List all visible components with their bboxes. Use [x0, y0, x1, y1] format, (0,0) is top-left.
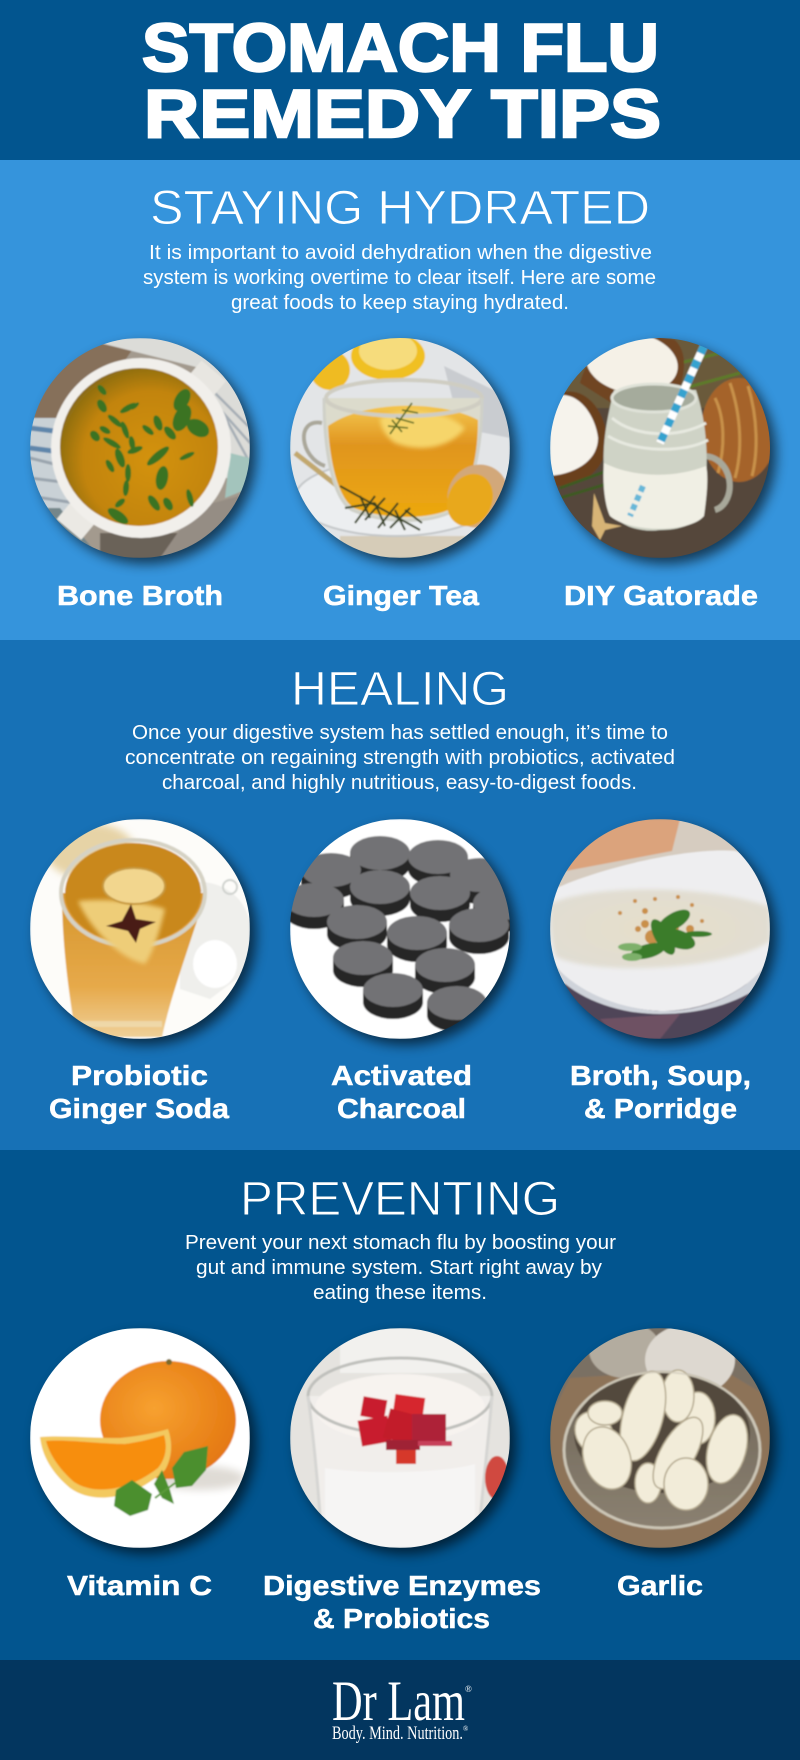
icon: DIY gatorade photo [550, 327, 777, 564]
text block: healing intro [125, 721, 675, 794]
panel: preventing [0, 1150, 800, 1660]
label: activated charcoal [331, 1060, 472, 1124]
heading: preventing: PREVENTING [240, 1173, 560, 1226]
text block: hydration intro: great foods to keep staying hydrated. [231, 291, 569, 314]
label: digestive enzymes and probiotics [263, 1570, 541, 1634]
text block: preventing intro: gut and immune system. Start right away by [196, 1256, 603, 1279]
text block: healing intro: charcoal, and highly nutritious, easy-to-digest foods. [162, 771, 637, 794]
label: DIY gatorade: DIY Gatorade [564, 580, 758, 611]
text block: hydration intro: It is important to avoid dehydration when the digestive [149, 241, 652, 264]
title: REMEDY TIPS [144, 76, 661, 152]
title: STOMACH FLU [142, 10, 659, 86]
logo: Dr Lam: ® [465, 1684, 472, 1694]
icon: activated charcoal photo [284, 819, 533, 1045]
label: activated charcoal: Activated [331, 1060, 472, 1091]
label: garlic: Garlic [617, 1570, 703, 1601]
icon: ginger tea photo [290, 332, 520, 564]
panel: staying hydrated [0, 160, 800, 640]
label: digestive enzymes and probiotics: & Probiotics [313, 1603, 490, 1634]
footer panel [0, 1660, 800, 1760]
icon: vitamin C orange photo [30, 1328, 256, 1554]
text block: hydration intro [143, 241, 656, 314]
label: vitamin C: Vitamin C [67, 1570, 212, 1601]
logo: Dr Lam [332, 1670, 472, 1744]
label: activated charcoal: Charcoal [337, 1093, 466, 1124]
heading: healing: HEALING [291, 663, 509, 716]
panel: healing [0, 640, 800, 1150]
label: probiotic ginger soda: Probiotic [71, 1060, 208, 1091]
heading: staying hydrated: STAYING HYDRATED [150, 182, 650, 235]
header panel [0, 0, 800, 160]
label: broth soup porridge [570, 1060, 751, 1124]
label: ginger tea: Ginger Tea [323, 580, 479, 611]
label: broth soup porridge: Broth, Soup, [570, 1060, 751, 1091]
icon: digestive enzymes yogurt photo [290, 1328, 516, 1554]
text block: preventing intro: Prevent your next stomach flu by boosting your [185, 1231, 616, 1254]
icon: broth soup porridge photo [550, 819, 776, 1045]
logo: Dr Lam: Body. Mind. Nutrition. [332, 1723, 463, 1744]
label: probiotic ginger soda [49, 1060, 229, 1124]
text block: preventing intro: eating these items. [313, 1281, 487, 1304]
text block: healing intro: Once your digestive system has settled enough, it’s time to [132, 721, 668, 744]
label: broth soup porridge: & Porridge [584, 1093, 737, 1124]
text block: hydration intro: system is working overtime to clear itself. Here are some [143, 266, 656, 289]
logo: Dr Lam: Dr Lam [332, 1670, 465, 1733]
title [142, 10, 661, 152]
label: bone broth: Bone Broth [57, 580, 223, 611]
text block: preventing intro [185, 1231, 616, 1304]
text block: healing intro: concentrate on regaining strength with probiotics, activated [125, 746, 675, 769]
label: probiotic ginger soda: Ginger Soda [49, 1093, 229, 1124]
icon: probiotic ginger soda photo [30, 819, 256, 1045]
icon: garlic photo [550, 1322, 776, 1554]
icon: bone broth photo [30, 338, 256, 564]
logo: Dr Lam: ® [463, 1725, 469, 1733]
label: digestive enzymes and probiotics: Digestive Enzymes [263, 1570, 541, 1601]
